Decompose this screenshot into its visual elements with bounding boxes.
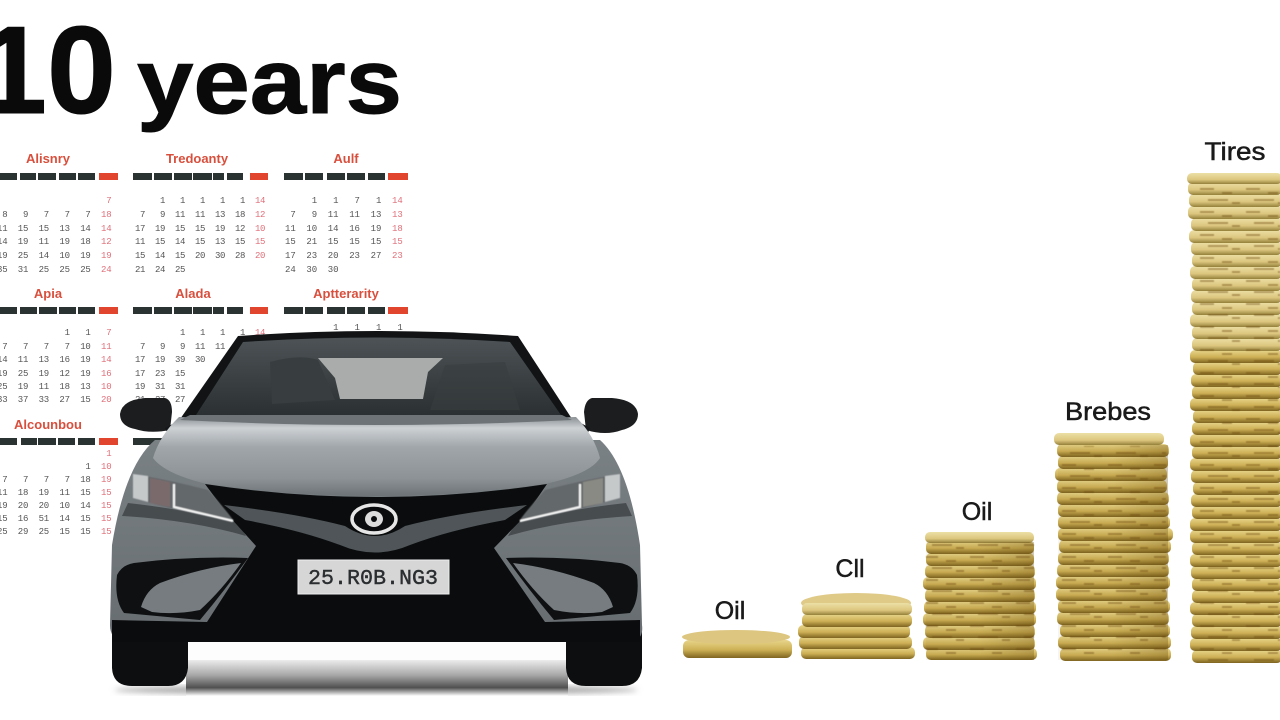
body crease left (122, 503, 246, 536)
calendar: month 4 (0, 286, 118, 405)
front grille (112, 484, 640, 642)
calendar: month 3 (284, 151, 408, 275)
white gap under bumper (188, 642, 566, 660)
calendar: month 2 (133, 151, 268, 275)
dashboard reflection (318, 358, 443, 399)
calendar: month 7 (0, 417, 163, 537)
left mirror (120, 398, 172, 432)
calendar: month 5: 21 27 27 (135, 395, 185, 405)
calendar: month 3: 7 9 11 11 13 13 (285, 210, 403, 220)
emblem (352, 505, 396, 533)
calendar: month 1: 7 (0, 196, 111, 206)
calendar: month 2: 17 19 15 15 19 12 10 (135, 224, 265, 234)
left air intake (116, 558, 248, 620)
calendar: month 5 (133, 286, 268, 405)
calendar: month 3: 11 10 14 16 19 18 (285, 224, 403, 234)
calendar: month 2: 11 15 14 15 13 15 15 (135, 237, 265, 247)
windshield cowl (180, 415, 572, 425)
body crease right (508, 503, 632, 536)
windshield (196, 338, 561, 415)
label: Cll: Cll (835, 555, 865, 583)
label: Tires: Tires (1204, 138, 1266, 166)
right air intake (506, 558, 638, 620)
calendar: month 3: 24 30 30 (285, 265, 339, 275)
calendar: month 6: 1 1 1 1 (285, 323, 403, 333)
calendar: month 4: 25 19 11 18 13 10 (0, 382, 111, 392)
calendar: month 7: 7 7 7 7 18 19 (0, 475, 111, 485)
calendar: month 4: Apia (34, 286, 63, 301)
calendar: month 2: 15 14 15 20 30 28 20 (135, 251, 265, 261)
calendar: month 3: 15 21 15 15 15 15 (285, 237, 403, 247)
calendar: month 7: 15 16 51 14 15 15 (0, 514, 111, 524)
calendar: month 3: 17 23 20 23 27 23 (285, 251, 403, 261)
coin stack: brakes (1054, 398, 1173, 661)
license plate (298, 560, 449, 594)
calendar: month 5: 17 19 39 30 (135, 355, 205, 365)
coin stack: oil 1 (682, 597, 792, 658)
calendar: month 7: Alcounbou (14, 417, 82, 432)
calendar: month 7: 1 (0, 449, 111, 459)
calendar: month 7: 25 29 25 15 15 15 (0, 527, 111, 537)
calendar: month 4: 14 11 13 16 19 14 (0, 355, 111, 365)
calendar: month 5: Alada (175, 286, 211, 301)
calendar: month 6: Aptterarity (313, 286, 380, 301)
license plate: 25.R0B.NG3 (308, 568, 438, 591)
calendar: month 1: 14 19 11 19 18 12 (0, 237, 111, 247)
calendar: month 6 (284, 286, 408, 333)
calendar: month 7: 19 20 20 10 14 15 (0, 501, 111, 511)
right tyre (566, 625, 642, 686)
grille chrome bar (224, 505, 527, 552)
title: 10 years (0, 2, 402, 140)
calendar: month 3: Aulf (333, 151, 359, 166)
coin stack: oil 2 (798, 555, 915, 659)
calendar: month 5: 7 9 9 11 11 (135, 342, 225, 352)
left tyre (112, 625, 188, 686)
calendar: month 4: 33 37 33 27 15 20 (0, 395, 111, 405)
label: Oil: Oil (962, 498, 992, 526)
car body (110, 440, 642, 642)
left headlight (133, 474, 234, 521)
calendar grid (0, 151, 408, 537)
label: Brebes: Brebes (1065, 398, 1151, 426)
calendar: month 1 (0, 151, 118, 275)
right headlight (519, 474, 620, 521)
calendar: month 4: 1 1 7 (0, 328, 111, 338)
calendar: month 4: 19 25 19 12 19 16 (0, 369, 111, 379)
calendar: month 4: 7 7 7 7 10 11 (0, 342, 111, 352)
calendar: month 1: 8 9 7 7 7 18 (0, 210, 111, 220)
coin stack: oil 3 (923, 498, 1037, 660)
calendar: month 1: 11 15 15 13 14 14 (0, 224, 111, 234)
car ground shadow (114, 685, 638, 695)
calendar: month 2: Tredoanty (166, 151, 229, 166)
calendar: month 2: 7 9 11 11 13 18 12 (135, 210, 265, 220)
car illustration (110, 331, 642, 696)
calendar: month 1: Alisnry (26, 151, 71, 166)
calendar: month 2: 21 24 25 (135, 265, 185, 275)
hood (153, 417, 600, 496)
calendar: month 7: 11 18 19 11 15 15 (0, 488, 111, 498)
right mirror (584, 398, 638, 433)
roof and pillars (178, 331, 574, 422)
calendar: month 1: 35 31 25 25 25 24 (0, 265, 111, 275)
calendar: month 5: 1 1 1 1 14 (135, 328, 265, 338)
calendar: month 2: 1 1 1 1 1 14 (135, 196, 265, 206)
calendar: month 1: 19 25 14 10 19 19 (0, 251, 111, 261)
calendar: month 7: 1 10 (0, 462, 111, 472)
label: Oil: Oil (715, 597, 745, 625)
coin stack: tires (1187, 138, 1280, 663)
title: 10 years: years (137, 31, 402, 133)
calendar: month 5: 19 31 31 (135, 382, 185, 392)
calendar: month 5: 17 23 15 (135, 369, 185, 379)
calendar: month 3: 1 1 7 1 14 (285, 196, 403, 206)
